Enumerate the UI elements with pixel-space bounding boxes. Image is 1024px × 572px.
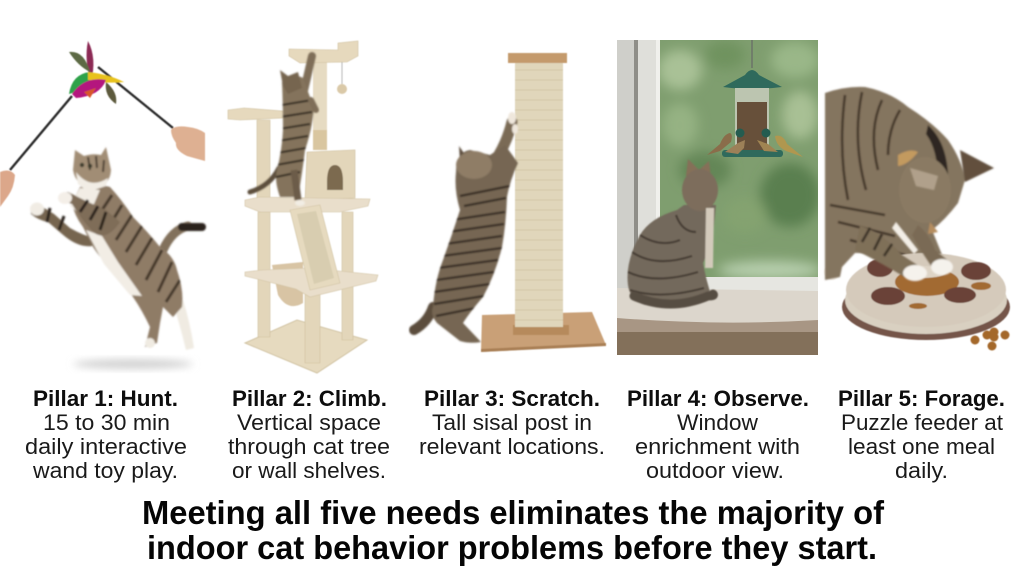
caption: pillar 1: Pillar 1: Hunt.	[33, 386, 178, 411]
caption: pillar 2	[228, 386, 390, 483]
white belly	[70, 188, 142, 296]
head	[899, 157, 951, 223]
white paws	[903, 265, 927, 281]
floor shadow	[73, 359, 193, 369]
caption: pillar 4: Pillar 4: Observe.	[627, 386, 809, 411]
kibble well	[895, 268, 959, 296]
right wand	[98, 67, 173, 128]
caption: pillar 1	[25, 386, 187, 483]
caption: pillar 5: Pillar 5: Forage.	[838, 386, 1005, 411]
closing statement: Meeting all five needs eliminates the majority of	[142, 494, 885, 531]
near arm	[60, 192, 120, 236]
left wand	[10, 96, 72, 170]
panel: scratching post photo	[414, 53, 606, 352]
caption: pillar 5: daily.	[895, 458, 948, 483]
hind paw	[145, 338, 155, 348]
panel: cat tree photo	[228, 41, 378, 373]
left perch	[228, 108, 283, 120]
puzzle feeder	[842, 253, 1010, 340]
caption: pillar 4: Window	[677, 410, 758, 435]
posts	[257, 120, 353, 363]
caption: pillar 1: wand toy play.	[32, 458, 178, 483]
feather toy	[69, 41, 124, 104]
far arm	[31, 203, 95, 246]
spilled kibble	[970, 328, 1010, 350]
top perch	[289, 41, 358, 63]
caption: pillar 3: relevant locations.	[419, 434, 605, 459]
caption: pillar 3	[419, 386, 605, 459]
cat tree	[228, 41, 378, 373]
caption: pillar 2: Pillar 2: Climb.	[232, 386, 387, 411]
garden view	[655, 40, 822, 285]
middle platform	[245, 197, 370, 212]
caption: pillar 4	[627, 386, 809, 483]
closing statement: indoor cat behavior problems before they start.	[147, 529, 877, 566]
cat: seated from behind	[628, 159, 718, 305]
panel: hunt photo	[0, 41, 205, 369]
caption: pillar 2: through cat tree	[228, 434, 390, 459]
panel: puzzle feeder photo	[824, 87, 1010, 350]
tail	[163, 226, 188, 250]
caption: pillar 4: outdoor view.	[646, 458, 784, 483]
cat: climbing tabby	[250, 56, 316, 206]
caption: pillar 1: daily interactive	[25, 434, 187, 459]
cat: scratching tabby	[414, 112, 518, 343]
panel: window observation photo	[617, 40, 822, 355]
hind leg white	[172, 300, 194, 350]
hanging ball	[341, 62, 343, 84]
feeding birds	[707, 133, 803, 157]
cat: foraging tabby	[825, 87, 994, 280]
hammock	[272, 262, 303, 306]
closing statement	[142, 494, 885, 566]
caption: pillar 2: or wall shelves.	[232, 458, 386, 483]
cat arms over feeder	[855, 222, 953, 281]
bird feeder	[722, 40, 783, 157]
window frame	[617, 40, 818, 291]
white paw rear	[824, 264, 840, 280]
ear	[960, 150, 994, 182]
left hand	[0, 171, 15, 207]
caption: pillar 5: Puzzle feeder at	[841, 410, 1003, 435]
window cushion	[617, 288, 818, 355]
body	[72, 185, 182, 347]
caption: pillar 4: enrichment with	[635, 434, 800, 459]
head	[73, 147, 111, 188]
sisal post	[481, 53, 606, 352]
dark head stripe	[926, 125, 948, 188]
house	[305, 150, 355, 200]
caption: pillar 3: Tall sisal post in	[432, 410, 592, 435]
caption: pillar 2: Vertical space	[237, 410, 381, 435]
caption: pillar 3: Pillar 3: Scratch.	[424, 386, 600, 411]
ramp	[290, 205, 340, 290]
caption: pillar 5: least one meal	[848, 434, 995, 459]
caption: pillar 1: 15 to 30 min	[43, 410, 170, 435]
base	[245, 320, 367, 373]
cat: leaping tabby	[30, 147, 202, 350]
lower platform	[245, 268, 378, 297]
right hand	[171, 126, 205, 161]
sliding caps	[867, 259, 893, 277]
caption: pillar 5	[838, 386, 1005, 483]
